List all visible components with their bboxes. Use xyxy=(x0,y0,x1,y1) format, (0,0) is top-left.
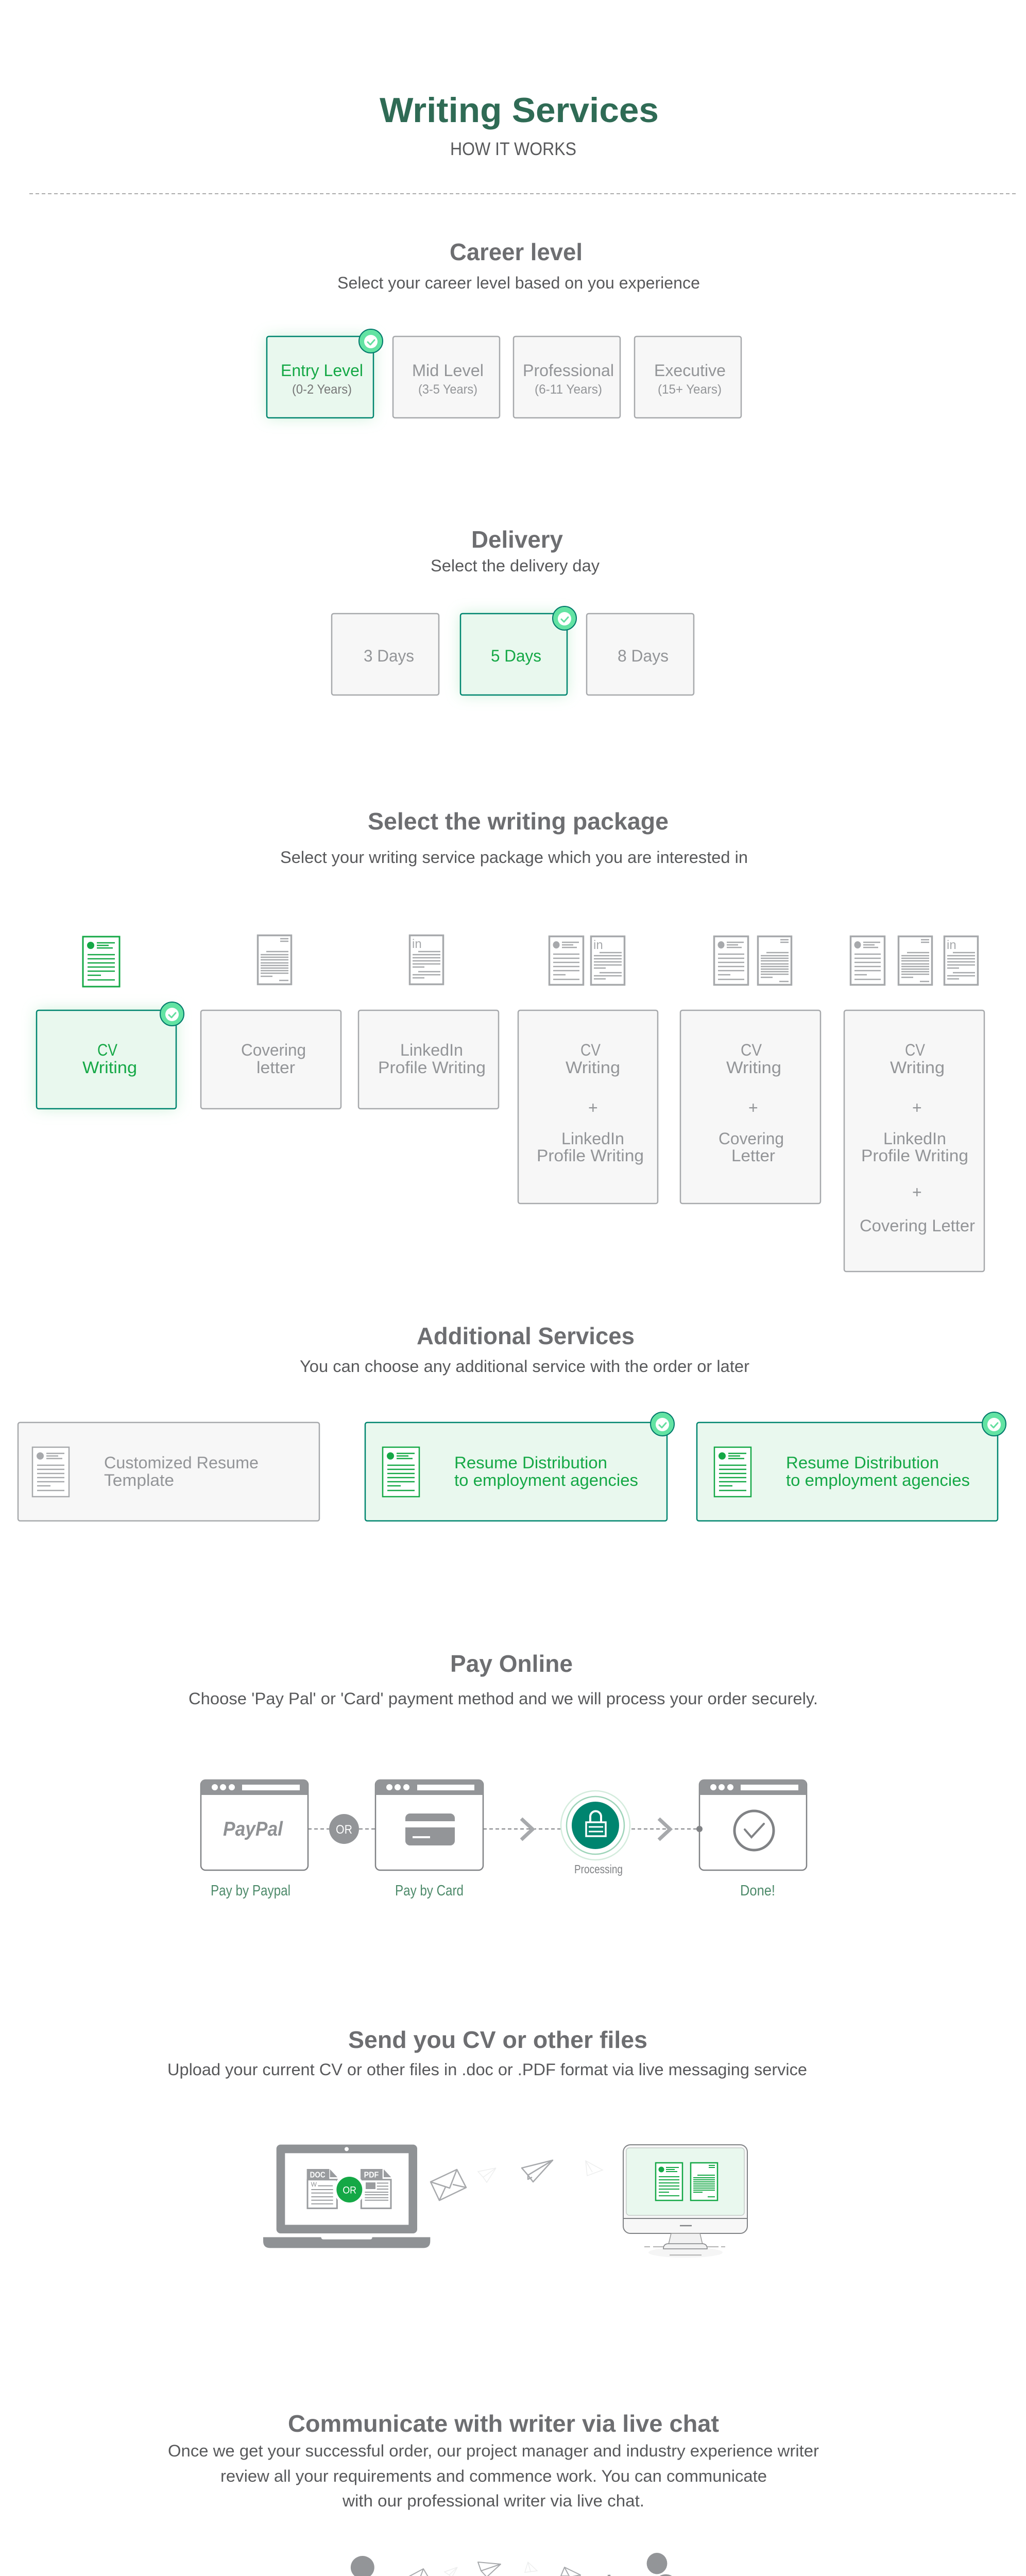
window: paypal: PayPal xyxy=(223,1818,283,1840)
icon: paper plane xyxy=(478,2562,501,2576)
card: cv plus covering letter xyxy=(680,937,820,1204)
card: resume distribution two: to employment agencies xyxy=(786,1471,970,1489)
icon: selected badge xyxy=(651,1412,674,1436)
label: processing: Processing xyxy=(574,1862,623,1876)
card: cv plus covering letter: + xyxy=(748,1098,758,1117)
card: cv writing xyxy=(37,1002,184,1109)
icon: faint paper plane xyxy=(586,2161,603,2176)
card: 5 days: 5 Days xyxy=(491,647,541,665)
icon: covering letter document xyxy=(258,936,292,984)
text: career level description: Select your career level based on you experience xyxy=(337,274,700,292)
icon: selected badge xyxy=(359,329,383,353)
panel: send files xyxy=(167,2026,807,2258)
text: delivery description: Select the delivery day xyxy=(431,556,600,575)
card: covering letter: Covering xyxy=(241,1041,306,1059)
panel: delivery xyxy=(332,526,694,695)
icon: selected badge xyxy=(982,1412,1006,1436)
card: customized resume template: Customized Resume xyxy=(104,1453,259,1472)
card: cv plus linkedin plus covering letter: Covering Letter xyxy=(860,1216,975,1235)
icon: processing lock xyxy=(561,1791,630,1860)
panel: live chat xyxy=(168,2410,819,2576)
card: cv plus linkedin plus covering letter: CV xyxy=(905,1041,926,1059)
card: cv plus covering letter: Covering xyxy=(719,1129,784,1148)
card: cv plus linkedin plus covering letter: Writing xyxy=(890,1058,945,1077)
card: cv plus linkedin: Profile Writing xyxy=(537,1146,644,1165)
icon: paper plane xyxy=(522,2160,553,2182)
card: cv plus linkedin plus covering letter: + xyxy=(912,1098,922,1117)
icon: envelope xyxy=(431,2170,466,2200)
card: customized resume template: Template xyxy=(104,1471,174,1489)
panel: career level xyxy=(267,239,741,418)
title: Writing Services xyxy=(380,91,659,130)
card: cv writing: Writing xyxy=(82,1058,137,1077)
text: additional services description: You can choose any additional service with the order or later xyxy=(300,1357,749,1376)
icon: laptop with doc or pdf: DOC xyxy=(310,2171,326,2180)
card: 3 days: 3 Days xyxy=(364,647,414,665)
card: linkedin profile writing: LinkedIn xyxy=(400,1041,463,1059)
icon: laptop with doc or pdf xyxy=(263,2145,430,2248)
icon: person with laptop front view xyxy=(329,2556,397,2576)
panel: additional services xyxy=(18,1323,1006,1521)
card: executive: (15+ Years) xyxy=(658,382,722,397)
icon: faint paper plane xyxy=(478,2168,496,2182)
card: cv plus linkedin plus covering letter: + xyxy=(912,1183,922,1201)
icon: laptop with doc or pdf: PDF xyxy=(364,2171,379,2180)
arrow: to done xyxy=(659,1819,670,1840)
card: cv plus linkedin: + xyxy=(588,1098,598,1117)
icon: envelope xyxy=(408,2569,430,2576)
text: live chat description: Once we get your successful order, our project manager and industry experience writer xyxy=(168,2442,819,2460)
card: 3 days xyxy=(332,614,439,695)
card: resume distribution two: Resume Distribution xyxy=(786,1453,939,1472)
heading: additional services: Additional Services xyxy=(417,1323,635,1349)
heading: delivery: Delivery xyxy=(471,526,563,553)
card: mid level: Mid Level xyxy=(412,361,484,380)
icons: cv, covering and linkedin documents xyxy=(851,937,978,985)
card: entry level xyxy=(267,329,383,418)
badge: or: OR xyxy=(336,1823,352,1837)
card: cv writing: CV xyxy=(97,1041,118,1059)
heading: writing package: Select the writing package xyxy=(368,808,669,835)
card: professional: Professional xyxy=(523,361,614,380)
icon: laptop with doc or pdf: OR xyxy=(343,2185,356,2196)
icon: laptop with doc or pdf: W xyxy=(311,2181,317,2188)
icon: envelope xyxy=(561,2567,580,2576)
card: 8 days xyxy=(587,614,694,695)
card: professional xyxy=(514,336,620,418)
icon: faint paper plane xyxy=(444,2567,457,2576)
badge: or xyxy=(329,1814,359,1844)
text: send files description: Upload your current CV or other files in .doc or .PDF format via live messaging service xyxy=(167,2060,807,2079)
label: pay by paypal: Pay by Paypal xyxy=(211,1883,290,1899)
text: writing package description: Select your writing service package which you are interested in xyxy=(280,848,748,867)
card: resume distribution two xyxy=(697,1412,1006,1521)
icon: linkedin document: in xyxy=(412,937,422,951)
card: customized resume template xyxy=(18,1422,319,1521)
card: entry level: (0-2 Years) xyxy=(292,382,352,397)
card: 8 days: 8 Days xyxy=(618,647,669,665)
card: executive: Executive xyxy=(654,361,726,380)
card: cv plus covering letter: CV xyxy=(741,1041,762,1059)
icon: green cv document xyxy=(83,937,119,987)
icon: selected badge xyxy=(553,606,576,630)
text: pay online description: Choose 'Pay Pal' or 'Card' payment method and we will process your order securely. xyxy=(189,1689,818,1708)
icon: monitor with documents xyxy=(623,2145,747,2258)
card: cv plus linkedin plus covering letter: Profile Writing xyxy=(861,1146,968,1165)
card: cv plus linkedin plus covering letter xyxy=(844,937,984,1272)
card: cv plus linkedin: Writing xyxy=(566,1058,620,1077)
card: cv plus linkedin: CV xyxy=(580,1041,601,1059)
text: live chat description: with our professional writer via live chat. xyxy=(342,2492,644,2510)
card: resume distribution one: Resume Distribution xyxy=(454,1453,607,1472)
icons: cv, covering and linkedin documents: in xyxy=(947,938,956,952)
card: executive xyxy=(635,336,741,418)
icons: cv and linkedin documents: in xyxy=(593,938,603,952)
card: resume distribution one: to employment agencies xyxy=(454,1471,638,1489)
card: cv plus linkedin xyxy=(518,937,658,1204)
heading: career level: Career level xyxy=(450,239,583,265)
card: mid level xyxy=(393,336,500,418)
heading: live chat: Communicate with writer via live chat xyxy=(288,2410,719,2437)
panel: writing package xyxy=(37,808,984,1272)
icon: person with laptop side view xyxy=(609,2553,676,2576)
card: cv plus linkedin: LinkedIn xyxy=(561,1129,624,1148)
window: done xyxy=(696,1780,807,1870)
heading: send files: Send you CV or other files xyxy=(348,2026,647,2053)
label: done: Done! xyxy=(740,1883,775,1899)
card: cv plus linkedin plus covering letter: LinkedIn xyxy=(883,1129,946,1148)
icons: cv and covering documents xyxy=(714,937,791,985)
heading: pay online: Pay Online xyxy=(450,1650,573,1677)
window: card xyxy=(375,1780,483,1870)
card: linkedin profile writing: Profile Writing xyxy=(378,1058,486,1077)
card: cv plus covering letter: Writing xyxy=(726,1058,781,1077)
card: resume distribution one xyxy=(365,1412,674,1521)
icon: faint paper plane xyxy=(525,2562,537,2572)
dashed flow connectors xyxy=(308,1828,699,1829)
card: covering letter: letter xyxy=(256,1058,295,1077)
icon: linkedin document xyxy=(410,936,443,984)
card: cv plus covering letter: Letter xyxy=(731,1146,775,1165)
card: linkedin profile writing xyxy=(358,1010,499,1109)
icon: selected badge xyxy=(160,1002,184,1026)
arrow: to processing xyxy=(521,1819,533,1840)
subtitle: HOW IT WORKS xyxy=(450,139,576,159)
window: paypal xyxy=(201,1780,308,1870)
card: entry level: Entry Level xyxy=(281,361,363,380)
text: live chat description xyxy=(168,2442,819,2510)
icons: cv and linkedin documents xyxy=(549,937,624,985)
panel: pay online xyxy=(189,1650,818,1899)
label: pay by card: Pay by Card xyxy=(395,1883,464,1899)
text: live chat description: review all your requirements and commence work. You can communicate xyxy=(220,2467,767,2485)
header xyxy=(29,91,1016,194)
card: professional: (6-11 Years) xyxy=(535,382,602,397)
card: 5 days xyxy=(460,606,576,695)
card: covering letter xyxy=(201,1010,341,1109)
card: mid level: (3-5 Years) xyxy=(418,382,477,397)
